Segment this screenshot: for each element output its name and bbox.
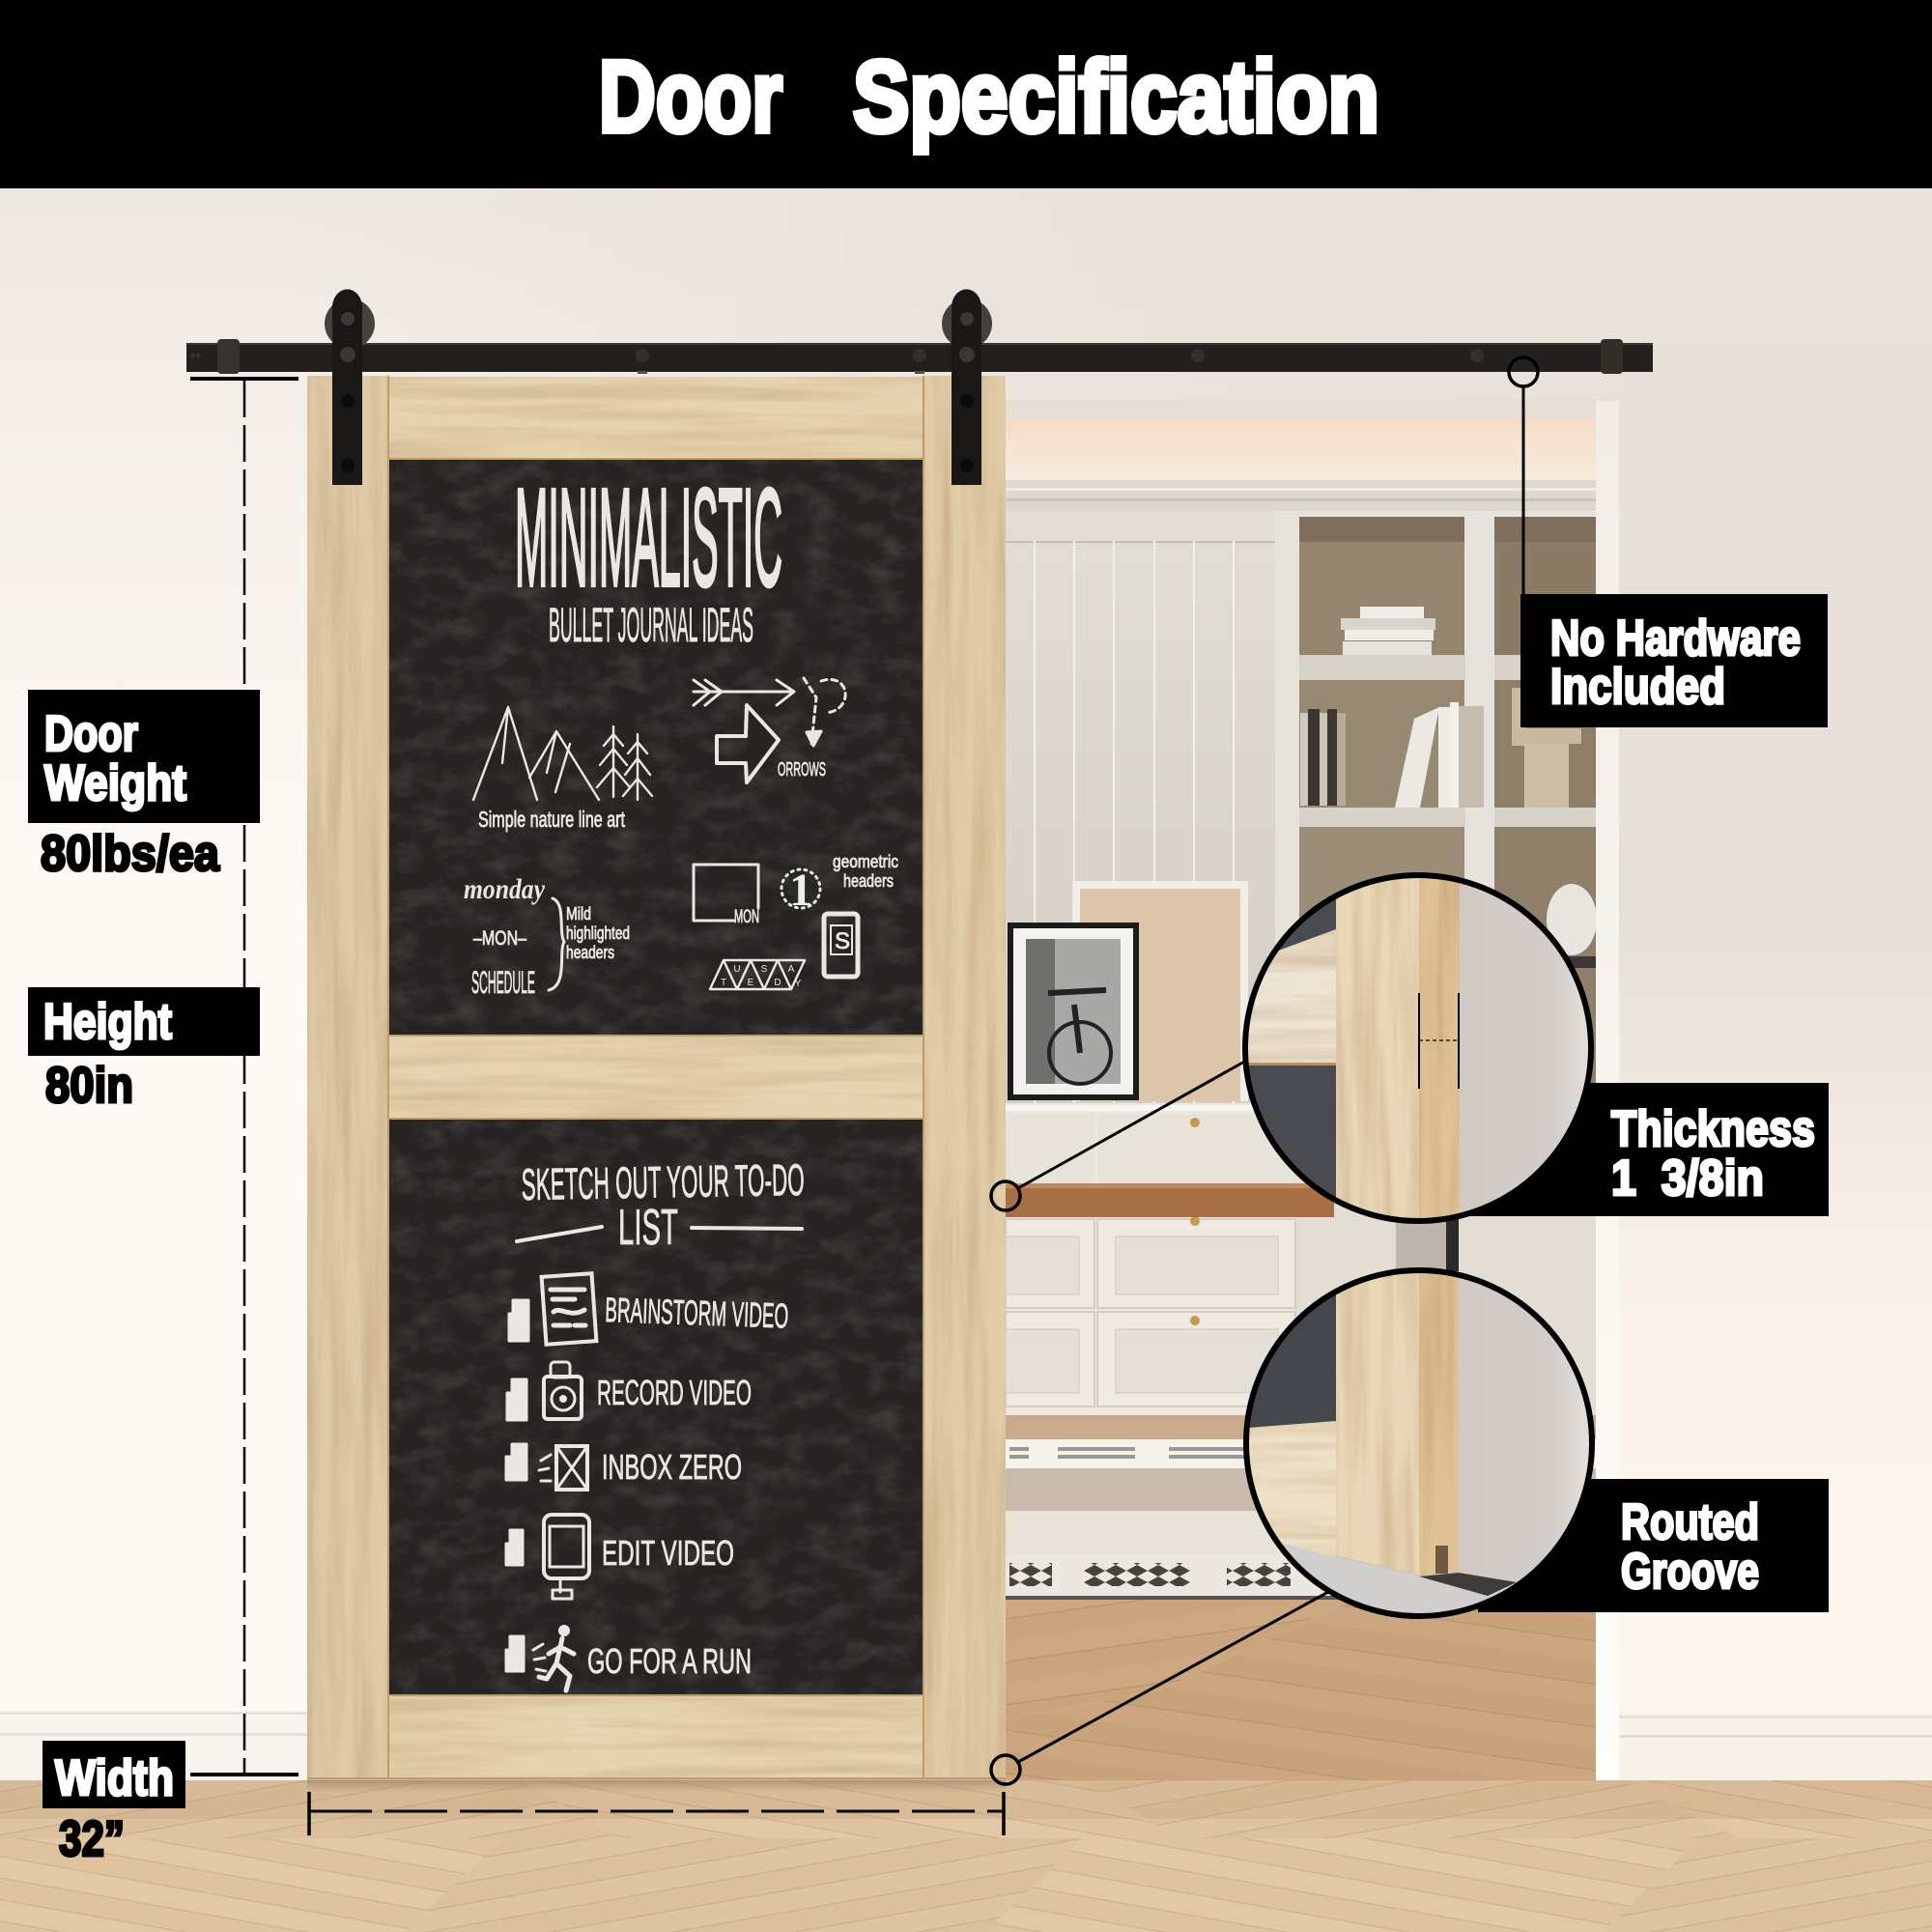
callout: routed groove: Routed xyxy=(1621,1494,1759,1550)
text: MINIMALISTIC xyxy=(515,460,782,615)
chalk art: minimalistic bullet journal xyxy=(464,460,898,1000)
label: height xyxy=(28,987,260,1056)
callout: thickness: Thickness xyxy=(1611,1101,1815,1157)
brace xyxy=(549,898,564,990)
mild highlighted headers: headers xyxy=(566,943,614,962)
chalk art: minimalistic bullet journal: SCHEDULE xyxy=(471,965,535,1000)
chalk art: minimalistic bullet journal: BULLET JOURNAL IDEAS xyxy=(549,598,753,652)
thickness marks xyxy=(1419,993,1459,1089)
arrows sketch xyxy=(694,678,845,782)
top chalkboard panel xyxy=(388,459,923,1036)
track right stop xyxy=(1601,339,1623,374)
row 3 inbox: INBOX ZERO xyxy=(602,1447,742,1487)
numbered circle xyxy=(781,865,820,916)
geometric headers: headers xyxy=(843,871,894,891)
arrows caption: ORROWS xyxy=(778,759,826,781)
bookshelf xyxy=(1275,511,1597,1129)
title: Specification xyxy=(853,41,1379,154)
cabinets and counter xyxy=(1006,1103,1596,1422)
doorway with room interior xyxy=(1006,399,1619,1780)
row 1 brainstorm: BRAINSTORM VIDEO xyxy=(605,1290,789,1336)
marker: track xyxy=(1509,357,1538,386)
mon label: –MON– xyxy=(473,927,526,950)
tuesday pennants: D xyxy=(774,978,781,988)
tuesday pennants: T xyxy=(721,978,726,988)
barn door xyxy=(307,376,1006,1778)
row 4 edit: EDIT VIDEO xyxy=(602,1533,734,1573)
leader lines xyxy=(1018,386,1523,1762)
middle rail xyxy=(388,1036,923,1119)
row 4 edit xyxy=(506,1515,734,1599)
label: door weight xyxy=(28,690,260,823)
callout: no hardware: No Hardware xyxy=(1550,611,1801,667)
nature caption: Simple nature line art xyxy=(478,807,625,832)
shelf ornaments xyxy=(1512,688,1597,968)
mountains sketch xyxy=(473,707,652,800)
chalk art: to-do list xyxy=(506,1154,805,1690)
callout: no hardware xyxy=(1520,594,1828,727)
row 1 brainstorm xyxy=(509,1273,789,1345)
list word: LIST xyxy=(618,1200,678,1256)
monday script: monday xyxy=(464,873,546,905)
zoom circle: door thickness xyxy=(1236,869,1604,1227)
label: height: Height xyxy=(43,994,172,1050)
list underlines xyxy=(517,1227,802,1241)
callout: thickness xyxy=(1468,1083,1829,1216)
header bar xyxy=(0,0,1932,188)
right hanger xyxy=(942,289,992,485)
zoom circle: routed groove xyxy=(1236,1261,1604,1633)
tuesday pennants xyxy=(710,960,805,989)
text: SKETCH OUT YOUR TO-DO xyxy=(521,1154,805,1209)
door edges xyxy=(307,376,1006,1778)
s box xyxy=(824,914,858,977)
left hanger xyxy=(325,289,375,485)
row 5 run: GO FOR A RUN xyxy=(587,1641,752,1681)
header box sketch xyxy=(694,865,758,921)
tuesday pennants: Y xyxy=(795,979,802,989)
framed pictures xyxy=(1008,881,1248,1101)
track bolts xyxy=(191,349,1484,374)
tuesday pennants: E xyxy=(748,978,754,988)
callout: routed groove xyxy=(1478,1479,1829,1612)
row 5 run xyxy=(506,1625,752,1690)
geometric headers xyxy=(833,852,898,891)
tuesday pennants: S xyxy=(761,964,768,975)
row 3 inbox xyxy=(506,1444,742,1490)
marker: thickness xyxy=(991,1181,1020,1210)
width dimension line xyxy=(309,1792,1004,1835)
floor xyxy=(0,1778,1932,1932)
mild highlighted headers xyxy=(566,904,630,962)
callout: thickness: 1 3/8in xyxy=(1611,1151,1764,1207)
barn door track xyxy=(186,339,1653,374)
label: door weight: Weight xyxy=(44,755,186,811)
geometric headers: geometric xyxy=(833,852,898,871)
label: width: Width xyxy=(55,1750,174,1806)
rug and room floor xyxy=(1006,1415,1596,1780)
row 2 record xyxy=(507,1362,752,1420)
header box mon: MON xyxy=(734,907,759,927)
top rail xyxy=(388,377,923,459)
label: door weight: Door xyxy=(44,706,138,762)
books xyxy=(1300,607,1484,808)
track left stop xyxy=(217,339,240,374)
s box: S xyxy=(835,928,850,954)
right stile xyxy=(923,376,1006,1778)
tuesday pennants: A xyxy=(788,964,795,975)
title: Door xyxy=(599,41,782,154)
value: height: 80in xyxy=(45,1058,133,1114)
mild highlighted headers: highlighted xyxy=(566,923,630,943)
mild highlighted headers: Mild xyxy=(566,904,591,923)
row 2 record: RECORD VIDEO xyxy=(597,1373,752,1412)
height dimension line xyxy=(190,379,298,1775)
marker: groove xyxy=(991,1755,1020,1784)
ceiling soffit and glow xyxy=(1006,399,1596,511)
left stile xyxy=(307,376,389,1778)
value: width: 32” xyxy=(59,1811,125,1867)
value: door weight: 80lbs/ea xyxy=(41,826,220,882)
numbered circle: 1 xyxy=(789,865,812,916)
tuesday pennants: U xyxy=(733,964,741,975)
callout: no hardware: Included xyxy=(1550,659,1725,715)
callout: routed groove: Groove xyxy=(1621,1544,1759,1600)
bottom chalkboard panel xyxy=(388,1119,923,1695)
bottom rail xyxy=(388,1695,923,1778)
panelled wall xyxy=(1006,511,1281,1111)
title xyxy=(599,41,1379,154)
door casing xyxy=(1596,401,1619,1780)
